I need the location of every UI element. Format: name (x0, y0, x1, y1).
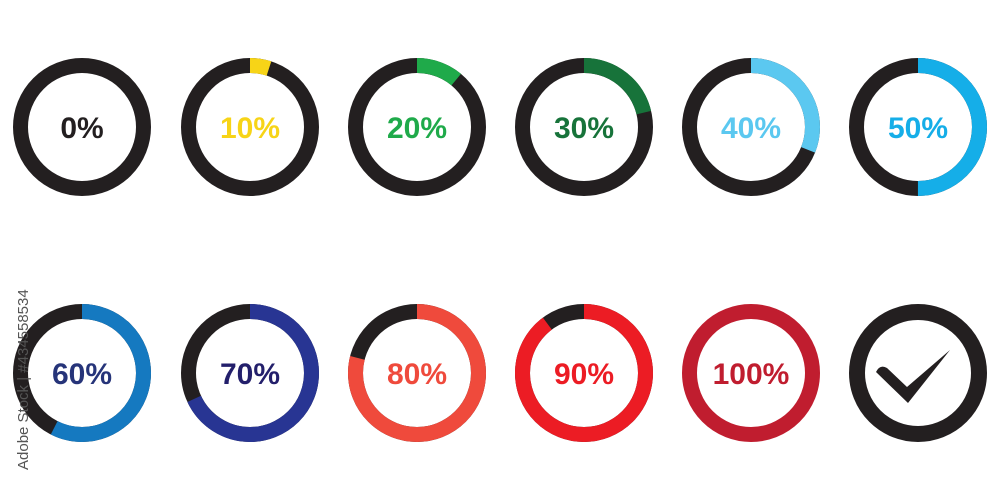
progress ring 90% (522, 312, 646, 434)
progress ring 90%: 90% (554, 358, 614, 391)
progress ring 70%: 70% (220, 358, 280, 391)
progress ring 80% (356, 312, 478, 434)
progress ring 30% (522, 66, 646, 188)
watermark text: Adobe Stock | #434558534 (15, 289, 32, 470)
progress ring 80%: 80% (387, 358, 447, 391)
progress ring 0% (20, 66, 144, 188)
progress ring 70% (188, 312, 312, 434)
progress ring 100% (690, 312, 812, 434)
progress ring 20%: 20% (387, 112, 447, 145)
progress ring 40% (690, 66, 812, 188)
progress ring 100%: 100% (713, 358, 789, 391)
progress ring 10%: 10% (220, 112, 280, 145)
progress ring 50% (856, 66, 980, 188)
progress ring 50%: 50% (888, 112, 948, 145)
progress ring 20% (356, 66, 478, 188)
progress ring 0%: 0% (60, 112, 104, 145)
progress ring 40%: 40% (721, 112, 781, 145)
progress ring 30%: 30% (554, 112, 614, 145)
progress ring 60% (20, 312, 144, 434)
progress ring 10% (188, 66, 312, 188)
icon: check mark circle (857, 312, 979, 434)
progress ring 60%: 60% (52, 358, 112, 391)
